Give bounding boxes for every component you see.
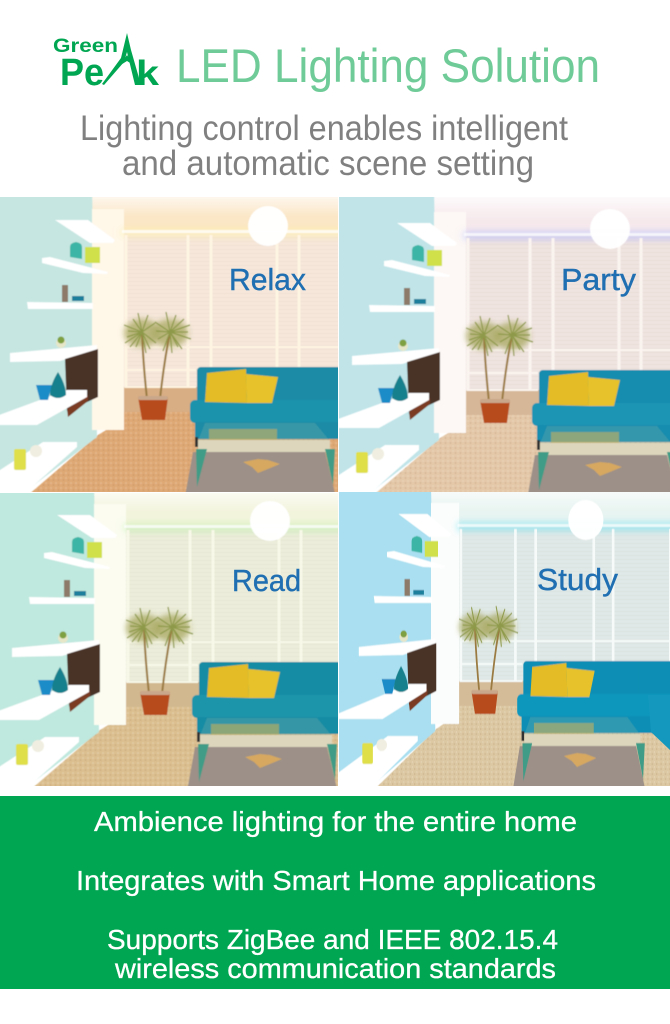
feature: wireless standards: wireless communication standards (114, 953, 556, 984)
subtitle: and automatic scene setting (122, 144, 534, 183)
panel: Read scene: Read (232, 563, 301, 598)
panel: Read scene (0, 493, 338, 786)
logo: GreenPeak: k (136, 54, 160, 93)
subtitle (80, 109, 568, 183)
panel: Relax scene (0, 197, 338, 492)
feature: wireless standards: Supports ZigBee and IEEE 802.15.4 (107, 924, 558, 955)
subtitle: Lighting control enables intelligent (80, 109, 568, 148)
logo: GreenPeak: Green (53, 35, 118, 57)
feature: ambience lighting: Ambience lighting for the entire home (94, 806, 577, 837)
panel: Party scene (339, 197, 670, 492)
panel: Party scene: Party (561, 262, 637, 297)
panel: Study scene (332, 481, 670, 796)
panel: Relax scene: Relax (229, 262, 306, 297)
feature: smart home: Integrates with Smart Home applications (76, 865, 596, 896)
feature: wireless standards (107, 924, 558, 984)
logo: GreenPeak: Pe (60, 52, 104, 94)
panel: Study scene: Study (537, 562, 619, 597)
logo: GreenPeak (53, 33, 160, 94)
panel: feature band (0, 796, 670, 989)
title: LED Lighting Solution (176, 39, 600, 92)
